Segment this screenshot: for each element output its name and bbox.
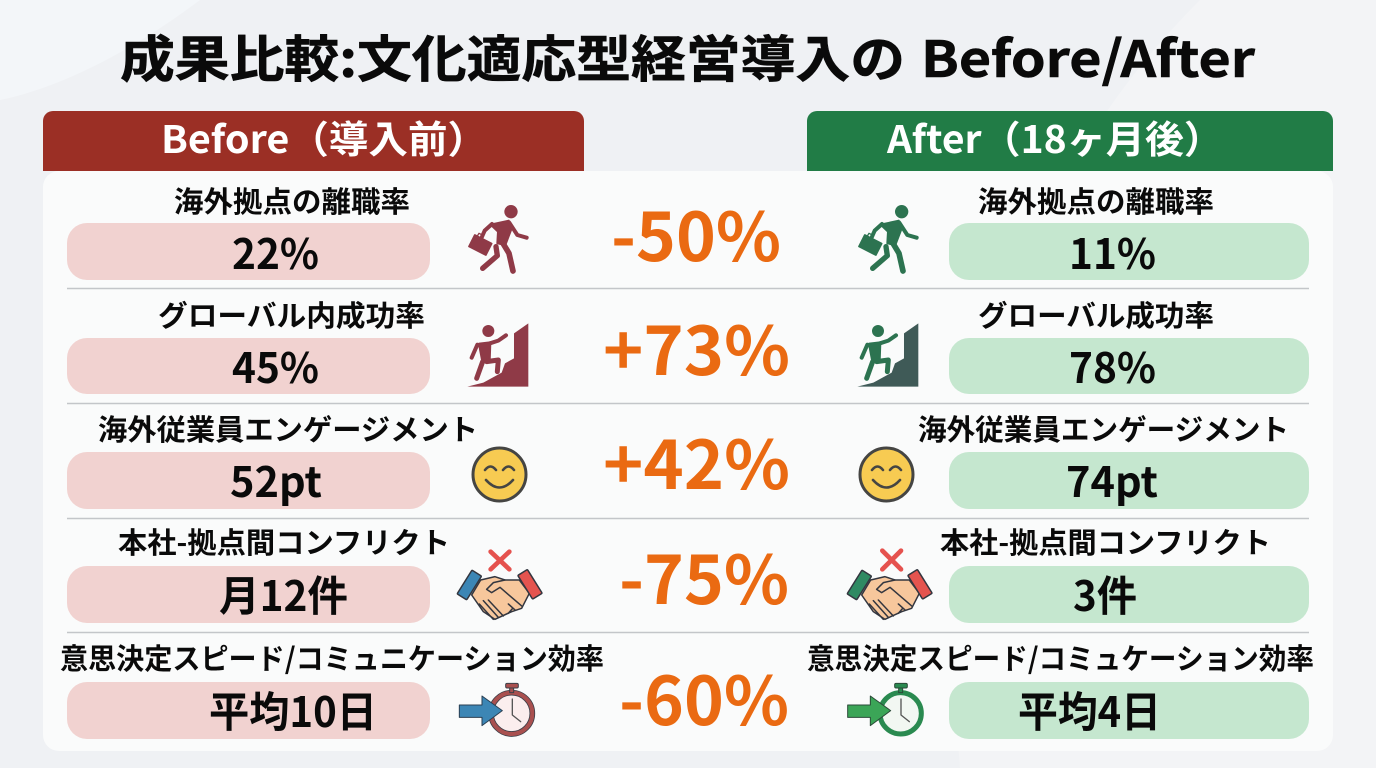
before label: 本社-拠点間コンフリクト: [118, 520, 450, 562]
after label: 海外従業員エンゲージメント: [918, 407, 1289, 449]
after value: 74pt: [1066, 449, 1158, 510]
icon: walking person after: [858, 205, 917, 271]
panel: comparison table background: [43, 171, 1333, 751]
after value: [949, 449, 1309, 510]
change: -60%: [619, 648, 789, 745]
before value: [67, 679, 430, 740]
title: 成果比較:文化適応型経営導入の: [120, 20, 905, 92]
header: Before: Before（導入前）: [161, 109, 487, 164]
after label: 本社-拠点間コンフリクト: [940, 520, 1271, 562]
before label: 意思決定スピード/コミュニケーション効率: [60, 636, 604, 678]
row 2: global success: [67, 293, 1309, 396]
after value: [949, 221, 1309, 282]
after value: 11%: [1069, 221, 1156, 282]
after value: 平均4日: [1018, 679, 1161, 740]
before value: 52pt: [230, 449, 322, 510]
row 5: decision speed: [60, 636, 1314, 745]
change: +73%: [603, 298, 790, 395]
header: Before: [43, 109, 584, 171]
after label: 海外拠点の離職率: [978, 179, 1214, 221]
title: Before/After: [921, 20, 1255, 92]
icon: handshake before: [457, 552, 542, 619]
after value: [949, 335, 1309, 396]
after value: [949, 679, 1309, 740]
before value: [67, 221, 430, 282]
after value: 78%: [1069, 335, 1156, 396]
change: +42%: [603, 412, 790, 509]
after value: [949, 563, 1309, 624]
before label: 海外拠点の離職率: [174, 179, 410, 221]
row 3: engagement: [67, 407, 1309, 510]
change: -75%: [619, 527, 789, 624]
icon: smiley before: [473, 448, 526, 501]
icon: stopwatch before: [459, 683, 532, 734]
before label: グローバル内成功率: [158, 293, 425, 335]
change: -50%: [611, 184, 781, 281]
icon: handshake after: [847, 551, 932, 619]
before value: 月12件: [219, 563, 348, 624]
before value: [67, 335, 430, 396]
title: [120, 20, 1255, 92]
icon: climbing person before: [467, 323, 528, 387]
before value: 45%: [232, 335, 319, 396]
icon: climbing person after: [857, 323, 918, 387]
header: After: After（18ヶ月後）: [886, 109, 1223, 164]
icon: stopwatch after: [848, 683, 921, 734]
before value: [67, 563, 430, 624]
icon: smiley after: [860, 448, 913, 501]
icon: walking person before: [468, 205, 527, 271]
before value: 平均10日: [209, 679, 377, 740]
after label: 意思決定スピード/コミュケーション効率: [807, 636, 1314, 678]
header: After: [807, 109, 1333, 171]
after label: グローバル成功率: [978, 293, 1214, 335]
row 1: turnover: [67, 179, 1309, 282]
row 4: conflict: [67, 520, 1309, 624]
after value: 3件: [1073, 563, 1137, 624]
before value: 22%: [232, 221, 319, 282]
before value: [67, 449, 430, 510]
before label: 海外従業員エンゲージメント: [98, 407, 478, 449]
